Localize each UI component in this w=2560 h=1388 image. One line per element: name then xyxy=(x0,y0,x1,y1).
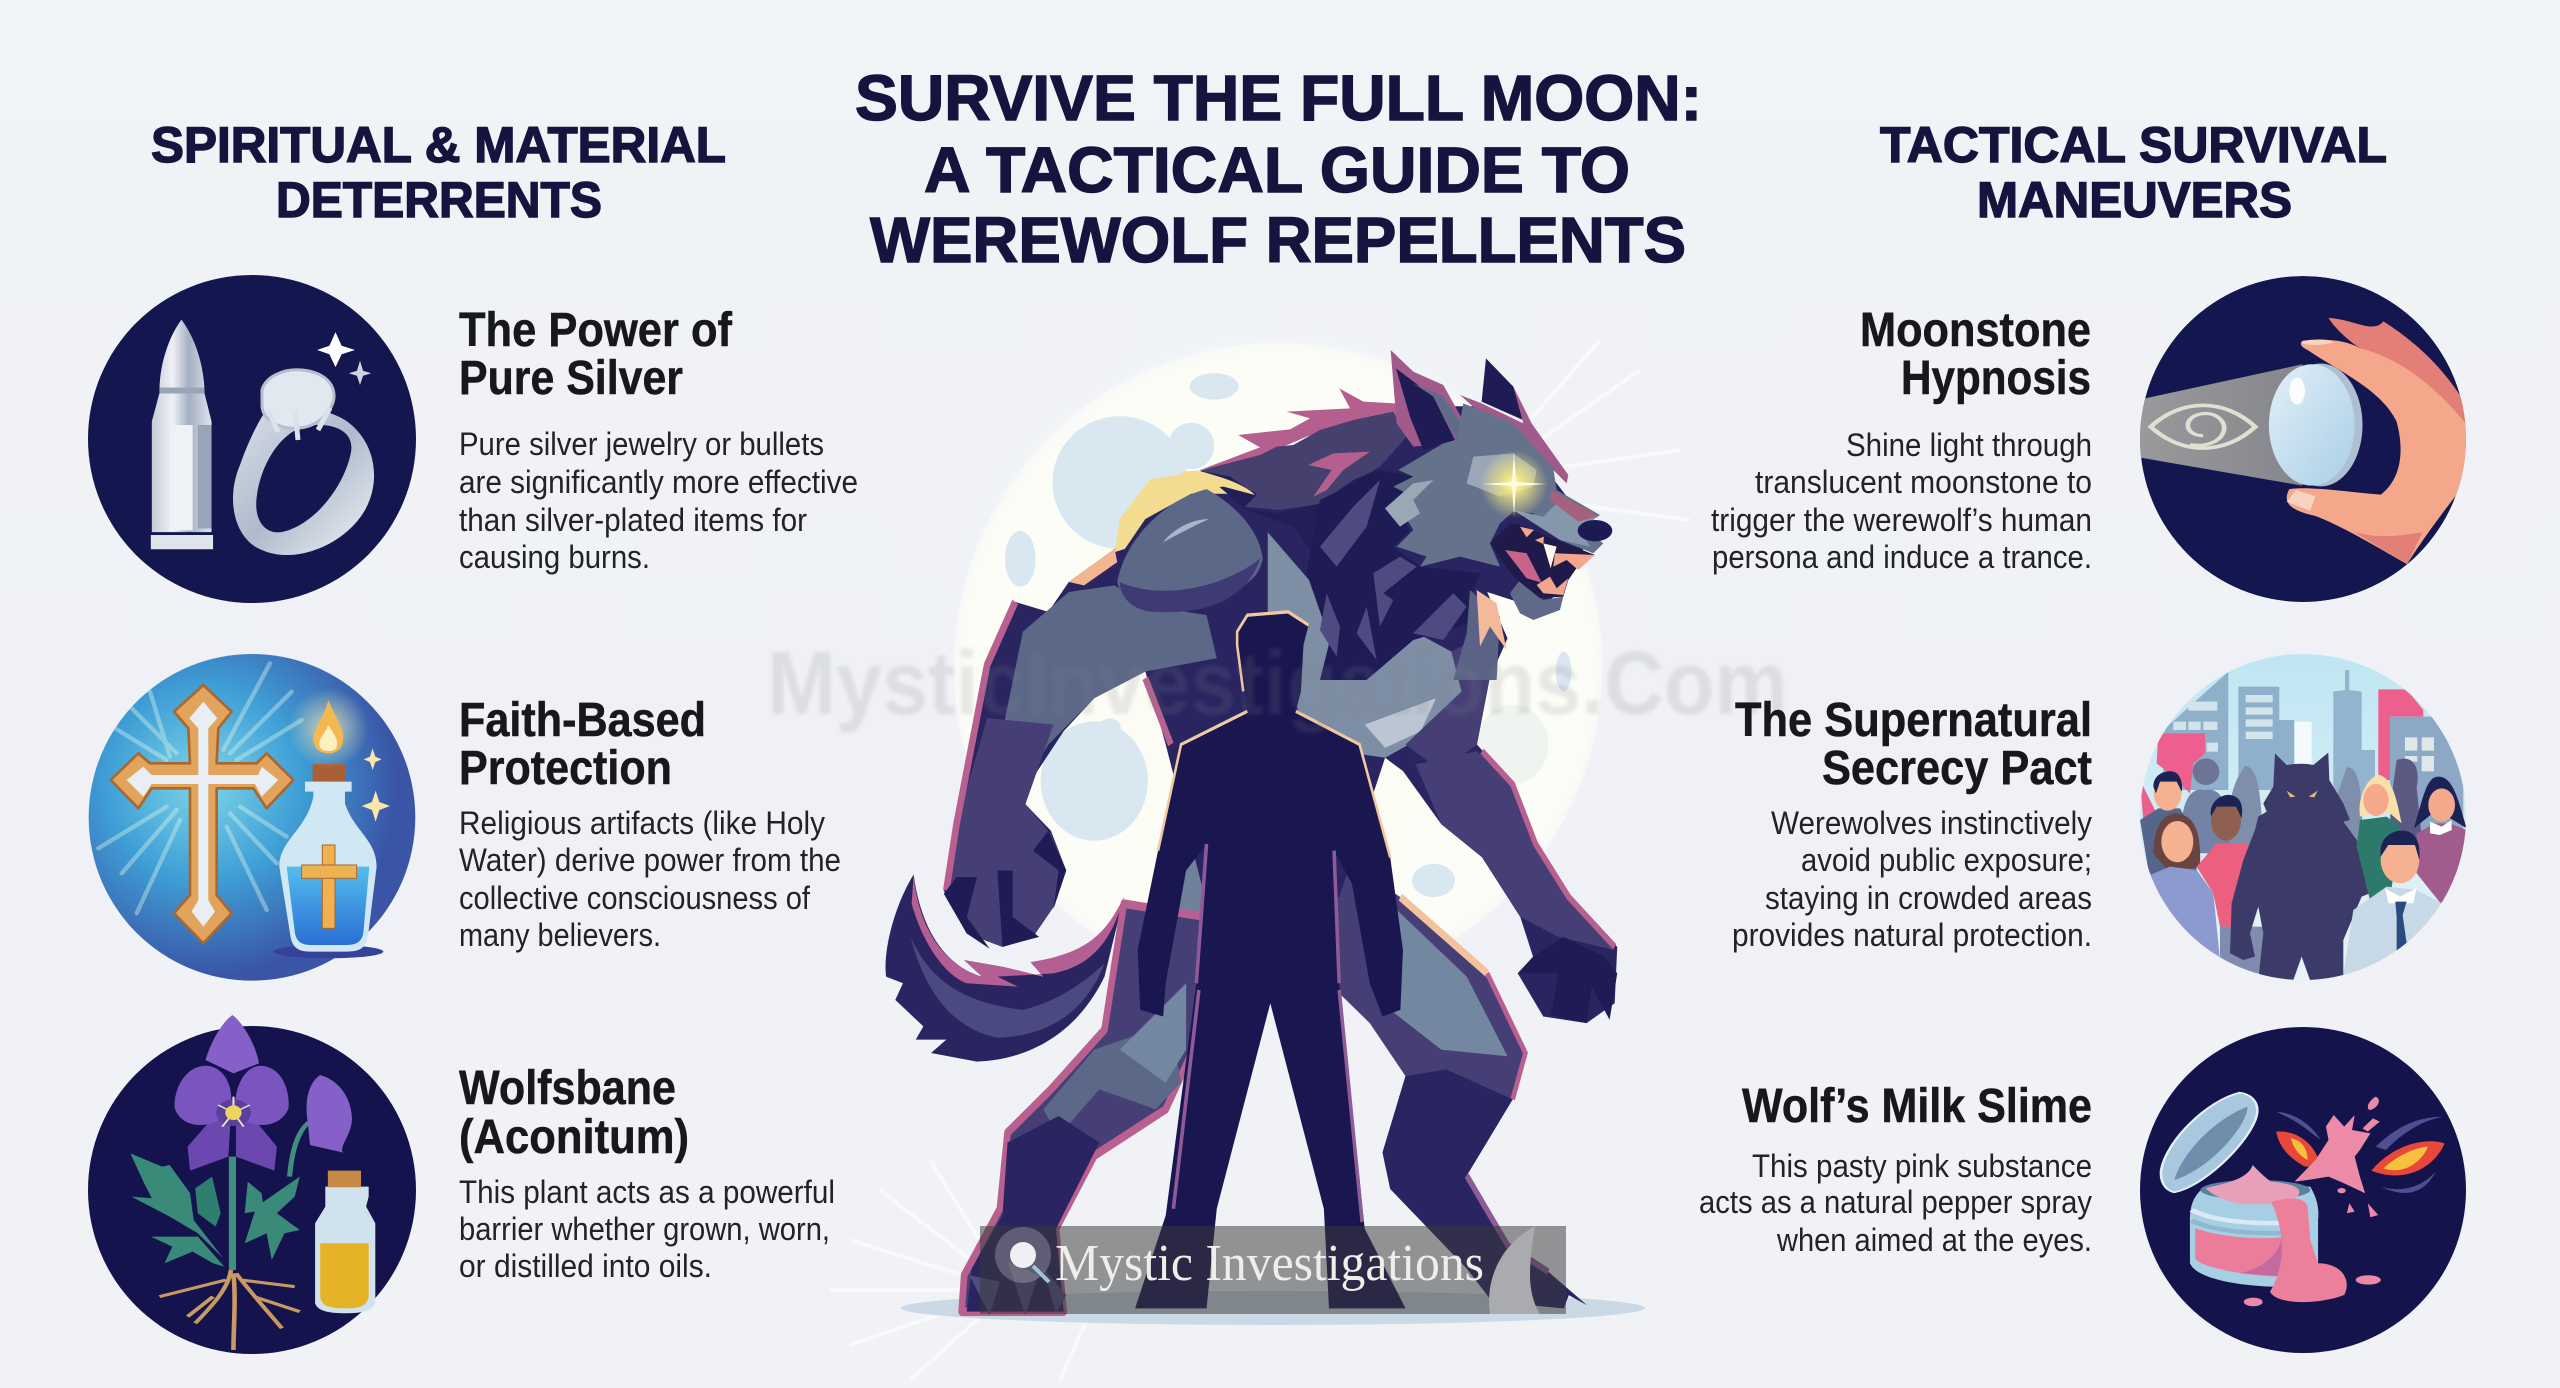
icon: slime jar and wolf eyes xyxy=(2140,1027,2466,1353)
heading: spiritual and material deterrents xyxy=(151,117,726,228)
ears xyxy=(1391,350,1568,483)
light rays behind figure xyxy=(830,340,1690,1380)
moon xyxy=(936,325,1620,1009)
item: wolf's milk slime xyxy=(1699,1027,2466,1353)
heading: Protection xyxy=(459,742,672,795)
icon: cross and holy water xyxy=(89,654,415,981)
open mouth xyxy=(1490,523,1595,598)
description: when aimed at the eyes. xyxy=(1776,1222,2092,1258)
description: many believers. xyxy=(459,917,661,953)
icon: hand holding moonstone xyxy=(2138,276,2475,602)
heading xyxy=(459,694,706,795)
description: Religious artifacts (like Holy xyxy=(459,805,825,841)
description xyxy=(459,1174,835,1284)
item: moonstone hypnosis xyxy=(1711,276,2475,602)
description xyxy=(459,805,841,953)
wolf left hind leg xyxy=(962,904,1207,1315)
heading: The Power of xyxy=(459,304,733,357)
jaw xyxy=(1510,580,1563,620)
description: Pure silver jewelry or bullets xyxy=(459,426,824,462)
human silhouette xyxy=(1135,612,1406,1308)
moon craters xyxy=(1005,373,1571,897)
item: wolfsbane xyxy=(88,1015,835,1354)
description: barrier whether grown, worn, xyxy=(459,1211,830,1247)
logo crescent moon xyxy=(1489,1226,1540,1314)
neck fur xyxy=(1307,470,1507,680)
description: acts as a natural pepper spray xyxy=(1699,1184,2092,1220)
item: the supernatural secrecy pact xyxy=(1732,654,2467,980)
heading: The Supernatural xyxy=(1735,694,2092,747)
description xyxy=(459,426,858,575)
mane xyxy=(1180,388,1407,553)
description: or distilled into oils. xyxy=(459,1248,712,1284)
wolf tail xyxy=(886,875,1124,1062)
heading: tactical survival maneuvers xyxy=(1880,117,2387,228)
wolf hip behind human xyxy=(1166,837,1385,997)
heading: tactical survival maneuvers: TACTICAL SURVIVAL xyxy=(1880,117,2387,173)
snout ridge xyxy=(1550,490,1598,522)
description xyxy=(1711,427,2092,575)
description: Werewolves instinctively xyxy=(1771,805,2092,841)
heading xyxy=(459,1062,689,1164)
icon: wolfsbane plant and oil xyxy=(88,1015,416,1354)
face xyxy=(1385,403,1603,567)
nose xyxy=(1578,520,1612,541)
heading: Moonstone xyxy=(1860,304,2091,357)
werewolf xyxy=(886,393,1617,1315)
description: trigger the werewolf’s human xyxy=(1711,502,2092,538)
ground shadow xyxy=(901,1291,1645,1325)
wolf left arm xyxy=(944,474,1263,949)
description: persona and induce a trance. xyxy=(1712,539,2092,575)
logo magnifier xyxy=(995,1227,1051,1283)
muzzle xyxy=(1513,497,1598,547)
item: the power of pure silver xyxy=(88,275,858,603)
glowing wolf eye xyxy=(1480,450,1548,518)
description xyxy=(1699,1148,2092,1258)
face highlights xyxy=(1385,453,1537,527)
description: This plant acts as a powerful xyxy=(459,1174,835,1210)
heading: tactical survival maneuvers: MANEUVERS xyxy=(1977,172,2292,228)
heading: Faith-Based xyxy=(459,694,706,747)
heading: Wolfsbane xyxy=(459,1062,676,1115)
wolf right arm xyxy=(1416,751,1617,1023)
icon: silver bullet and ring xyxy=(88,275,416,603)
description xyxy=(1732,805,2092,953)
heading: spiritual and material deterrents: SPIRITUAL & MATERIAL xyxy=(151,117,726,173)
heading: spiritual and material deterrents: DETERRENTS xyxy=(276,172,602,228)
logo wordmark: Mystic Investigations xyxy=(1055,1235,1484,1292)
description: translucent moonstone to xyxy=(1755,464,2092,500)
description: Shine light through xyxy=(1846,427,2092,463)
title: A TACTICAL GUIDE TO xyxy=(924,134,1630,206)
description: staying in crowded areas xyxy=(1765,880,2092,916)
heading xyxy=(1735,694,2092,795)
description: are significantly more effective xyxy=(459,464,858,500)
description: This pasty pink substance xyxy=(1752,1148,2092,1184)
title: WEREWOLF REPELLENTS xyxy=(870,204,1686,276)
watermark text: MysticInvestigations.Com xyxy=(767,634,1788,734)
heading: (Aconitum) xyxy=(459,1111,689,1164)
description: avoid public exposure; xyxy=(1801,842,2092,878)
heading: Hypnosis xyxy=(1901,352,2091,405)
item: faith-based protection xyxy=(89,654,841,981)
description: than silver-plated items for xyxy=(459,502,807,538)
logo banner xyxy=(980,1226,1566,1314)
heading xyxy=(1860,304,2091,405)
wolf right hind leg xyxy=(1329,851,1587,1308)
heading: Pure Silver xyxy=(459,352,683,405)
description: Water) derive power from the xyxy=(459,842,841,878)
description: causing burns. xyxy=(459,539,650,575)
wolf head and mane xyxy=(1180,350,1612,680)
description: provides natural protection. xyxy=(1732,917,2092,953)
heading: Secrecy Pact xyxy=(1822,742,2092,795)
wolf chest xyxy=(1268,532,1490,771)
title xyxy=(855,62,1702,276)
icon: werewolf in a crowd xyxy=(2140,654,2467,980)
title: SURVIVE THE FULL MOON: xyxy=(855,62,1702,134)
wolf upper body xyxy=(944,393,1617,1023)
heading: Wolf’s Milk Slime xyxy=(1742,1080,2092,1133)
heading xyxy=(459,304,733,405)
description: collective consciousness of xyxy=(459,880,810,916)
